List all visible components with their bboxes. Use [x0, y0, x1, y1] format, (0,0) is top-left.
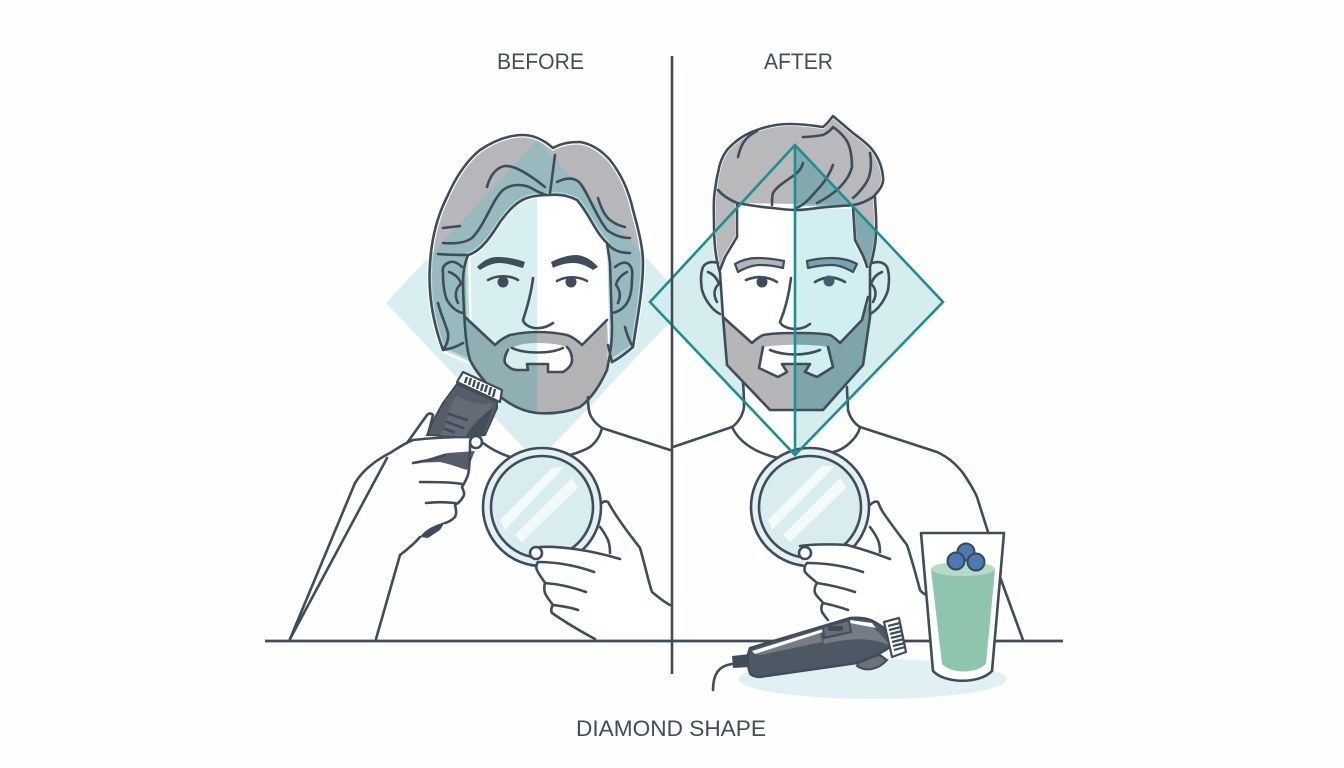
after eyes, brows, and nose	[735, 258, 857, 329]
after diamond overlay on hair	[796, 148, 875, 267]
after ears	[701, 262, 889, 314]
before neck and shoulders	[483, 397, 670, 457]
before diamond overlay on hair	[430, 140, 642, 362]
after diamond outline	[650, 145, 943, 455]
after neck and shoulders	[673, 383, 1023, 640]
heading: after: AFTER	[764, 49, 833, 74]
after hair outline and strands	[714, 116, 883, 273]
plate shadow under objects	[739, 659, 1007, 699]
before beard and face outline	[463, 243, 612, 413]
before hand gripping trimmer	[407, 414, 482, 523]
before ears	[443, 262, 632, 313]
icon: smoothie glass with blueberries	[921, 533, 1004, 681]
icon: clipper on table	[713, 618, 906, 690]
before hair outline and strands	[430, 135, 643, 362]
heading: before: BEFORE	[497, 49, 584, 74]
before diamond background	[386, 140, 688, 462]
panel: after figure	[650, 116, 1023, 640]
caption: diamond shape: DIAMOND SHAPE	[576, 716, 766, 741]
after head fills	[714, 116, 883, 458]
after diamond background	[650, 145, 943, 455]
before arm with trimmer hand	[290, 437, 470, 639]
after hand mirror	[751, 448, 869, 566]
center divider line	[671, 56, 673, 674]
before hand mirror	[483, 448, 601, 566]
after hand holding mirror	[799, 502, 927, 640]
before eyes, brows, and nose	[477, 255, 598, 328]
before hand holding mirror	[530, 501, 670, 640]
before head fills	[430, 135, 643, 414]
after beard and face outline	[720, 267, 870, 410]
trimmer held in hand	[413, 372, 502, 538]
panel: before figure	[290, 135, 688, 640]
tabletop line	[265, 640, 1063, 642]
infographic illustration	[265, 54, 1063, 736]
